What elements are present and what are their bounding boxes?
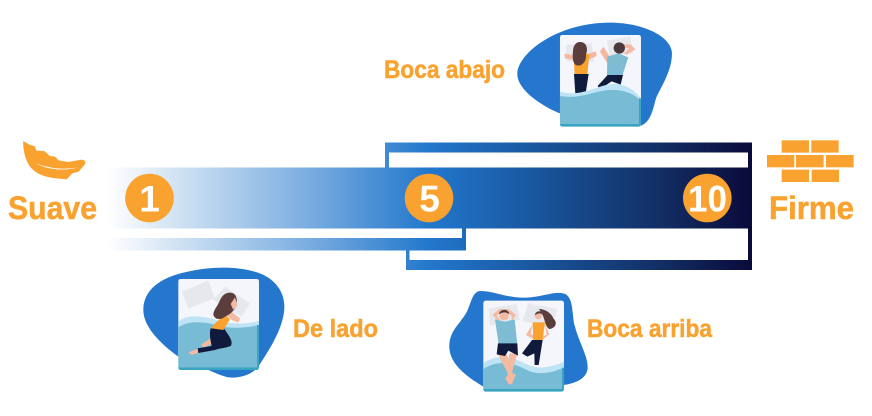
firmness scale bars xyxy=(108,142,752,270)
pillows xyxy=(182,281,250,317)
marker: 1: 1 xyxy=(139,178,160,220)
marker: 1 xyxy=(125,174,174,222)
woman xyxy=(564,42,597,93)
illustration: Boca abajo xyxy=(517,23,672,127)
main gradient bar xyxy=(108,168,752,228)
blanket xyxy=(483,357,564,390)
pillows xyxy=(489,303,557,328)
mattress xyxy=(483,301,564,392)
blob xyxy=(449,291,588,387)
mattress xyxy=(560,35,641,127)
blob xyxy=(517,23,672,127)
lower bracket: back sleepers xyxy=(406,228,752,270)
lower left bar: side sleepers xyxy=(108,228,466,250)
woman xyxy=(522,309,556,365)
upper bracket: stomach sleepers xyxy=(385,142,752,168)
label: De lado: De lado xyxy=(293,315,378,343)
illustration: De lado xyxy=(143,268,284,378)
mattress xyxy=(178,279,259,370)
illustration: Boca arriba xyxy=(449,291,588,392)
marker: 5 xyxy=(405,174,453,222)
label: Boca arriba: Boca arriba xyxy=(587,315,713,343)
pillows xyxy=(566,37,633,62)
label: Suave: Suave xyxy=(8,190,97,226)
man xyxy=(598,42,635,89)
label: Boca abajo: Boca abajo xyxy=(384,56,505,84)
blanket xyxy=(178,316,259,368)
marker: 5: 5 xyxy=(419,178,440,220)
woman xyxy=(188,293,240,355)
blanket xyxy=(560,84,641,125)
label: Firme: Firme xyxy=(769,190,854,226)
icon: bricks xyxy=(767,140,854,182)
marker: 10: 10 xyxy=(688,178,727,220)
icon: feather xyxy=(23,141,85,179)
man xyxy=(493,309,518,384)
blob xyxy=(143,268,284,378)
